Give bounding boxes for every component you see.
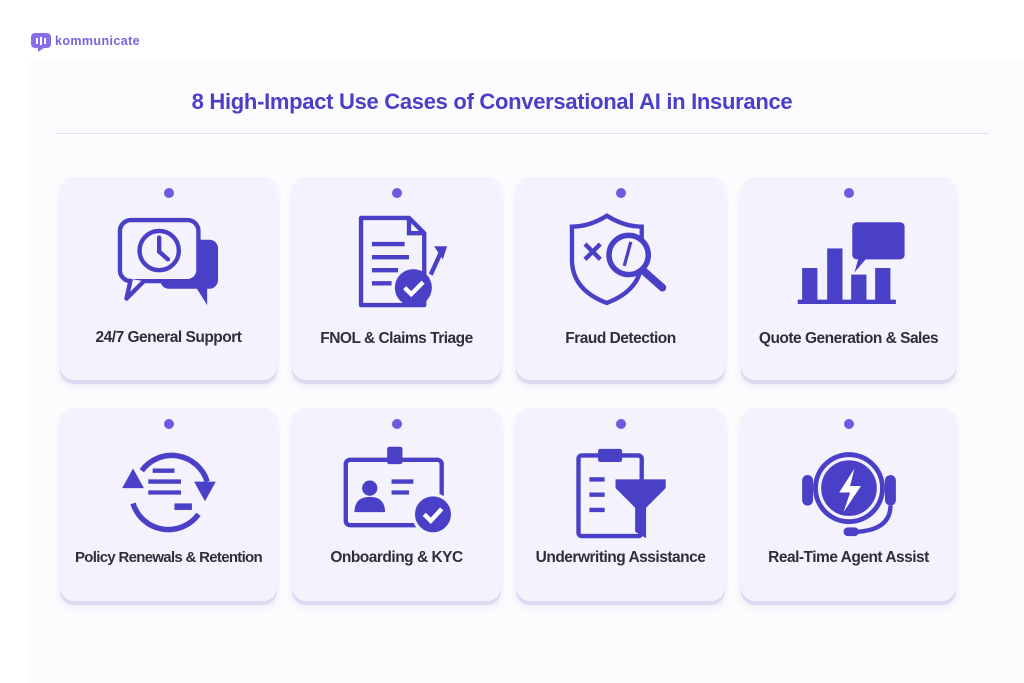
icon: bar chart with speech bubble — [798, 222, 905, 304]
icon: clipboard funnel — [576, 448, 666, 538]
card: 24/7 General Support: 24/7 General Support — [96, 329, 241, 346]
card: Policy Renewals & Retention: Policy Renewals & Retention — [75, 549, 262, 566]
icon: shield magnifier — [570, 213, 666, 306]
card: FNOL & Claims Triage — [292, 177, 501, 380]
card: Policy Renewals & Retention — [60, 408, 277, 601]
card: Real-Time Agent Assist — [741, 408, 956, 601]
icon: ID card check — [344, 446, 451, 532]
card: Onboarding & KYC: Onboarding & KYC — [330, 549, 463, 566]
card: Fraud Detection: Fraud Detection — [565, 330, 676, 347]
card: Quote Generation & Sales: Quote Generation & Sales — [759, 330, 938, 347]
card: FNOL & Claims Triage: FNOL & Claims Triage — [320, 330, 473, 347]
icon: chat clock — [118, 218, 218, 305]
logo — [31, 33, 140, 52]
icon: document check arrow — [358, 216, 448, 308]
card: Underwriting Assistance: Underwriting Assistance — [536, 549, 705, 566]
title: 8 High-Impact Use Cases of Conversational AI in Insurance — [192, 89, 792, 114]
card: Onboarding & KYC — [292, 408, 501, 601]
card: Fraud Detection — [516, 177, 725, 380]
card: 24/7 General Support — [60, 177, 277, 380]
icon: headset lightning — [802, 452, 896, 536]
card: Quote Generation & Sales — [741, 177, 956, 380]
logo: kommunicate — [55, 34, 140, 48]
card: Real-Time Agent Assist: Real-Time Agent Assist — [768, 549, 929, 566]
icon: renewal arrows document — [122, 452, 216, 532]
card: Underwriting Assistance — [516, 408, 725, 601]
